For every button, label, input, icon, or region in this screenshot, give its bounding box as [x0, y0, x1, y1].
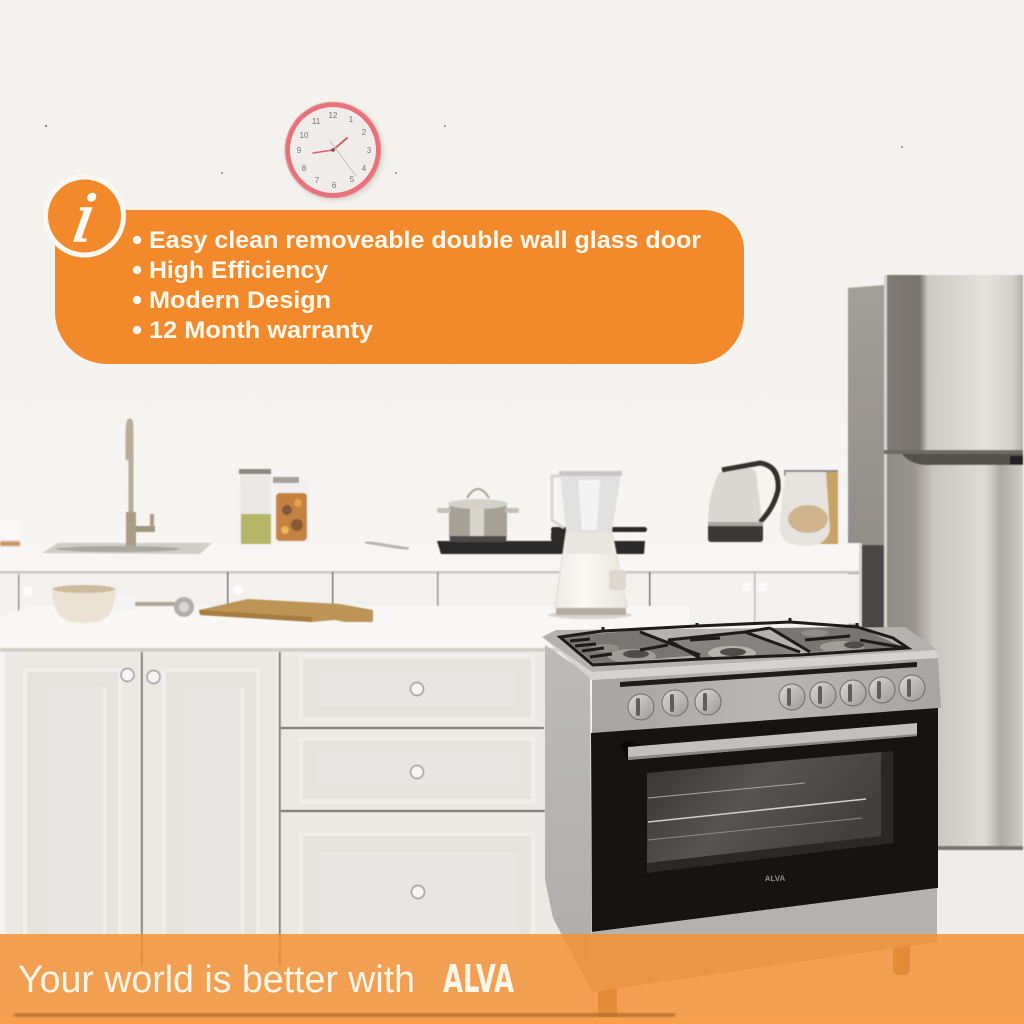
oven [542, 618, 941, 1021]
blender [548, 471, 632, 619]
burners [591, 630, 864, 663]
clock numerals: 5 [350, 175, 355, 184]
feature 2: High Efficiency [149, 257, 329, 284]
cabinet door left [5, 652, 141, 952]
bowl [52, 585, 116, 623]
cutting board [199, 599, 373, 622]
front counter [0, 606, 690, 652]
tagline: Your world is better with [18, 959, 415, 1001]
burner wells [562, 627, 905, 664]
fridge [848, 275, 1023, 850]
oven legs [598, 940, 910, 1021]
kick plate [592, 888, 937, 992]
floor [0, 848, 1024, 1024]
clock numerals: 9 [297, 146, 302, 155]
clock numerals: 11 [312, 117, 321, 126]
hand blender [112, 594, 194, 617]
clock numerals: 7 [315, 176, 320, 185]
clock numerals: 4 [362, 164, 367, 173]
knobs [628, 675, 925, 720]
kettle [708, 463, 778, 542]
clock numerals: 6 [332, 181, 337, 190]
clock numerals: 1 [349, 115, 354, 124]
utensil on counter [365, 542, 409, 549]
cooktop, pot [437, 489, 647, 554]
wall [0, 0, 1024, 560]
faucet and sink [42, 421, 212, 554]
panel background [55, 210, 744, 364]
cabinet door right [143, 652, 279, 952]
banner shadow [14, 1013, 675, 1017]
banner lower strip [0, 1017, 1024, 1024]
clock numerals [297, 111, 372, 190]
oven logo: ALVA [765, 874, 786, 883]
clock numerals: 12 [329, 111, 338, 120]
glass jug [780, 470, 838, 546]
clock numerals: 3 [367, 146, 372, 155]
drawer three [281, 812, 554, 952]
clock hands [313, 138, 356, 176]
icon: info: i [67, 176, 101, 257]
clock numerals: 2 [362, 128, 367, 137]
drawer one [281, 652, 544, 728]
feature 1: Easy clean removeable double wall glass door [149, 227, 701, 254]
bottom banner [0, 934, 1024, 1024]
control panel [592, 658, 941, 733]
cooktop plate [542, 627, 937, 672]
cabinet knobs [121, 668, 424, 898]
small items left of sink [0, 521, 20, 546]
control panel label strip [620, 662, 917, 687]
jars [239, 469, 309, 544]
wall clock [285, 102, 384, 201]
features panel [43, 174, 744, 364]
drawer two [281, 730, 544, 810]
oven side panel [545, 645, 592, 992]
feature 3: Modern Design [149, 287, 331, 314]
clock numerals: 8 [302, 164, 307, 173]
lower cabinets [0, 652, 560, 966]
oven door [591, 708, 938, 932]
pan supports [560, 618, 908, 665]
clock numerals: 10 [300, 131, 309, 140]
icon: info [43, 174, 126, 258]
back counter and cabinets [0, 543, 862, 628]
feature list [133, 227, 701, 344]
feature 4: 12 Month warranty [149, 317, 374, 344]
oven window [647, 751, 893, 873]
door handle [620, 723, 917, 760]
banner band [0, 934, 1024, 1024]
brand logo text: ALVA [443, 957, 514, 1001]
